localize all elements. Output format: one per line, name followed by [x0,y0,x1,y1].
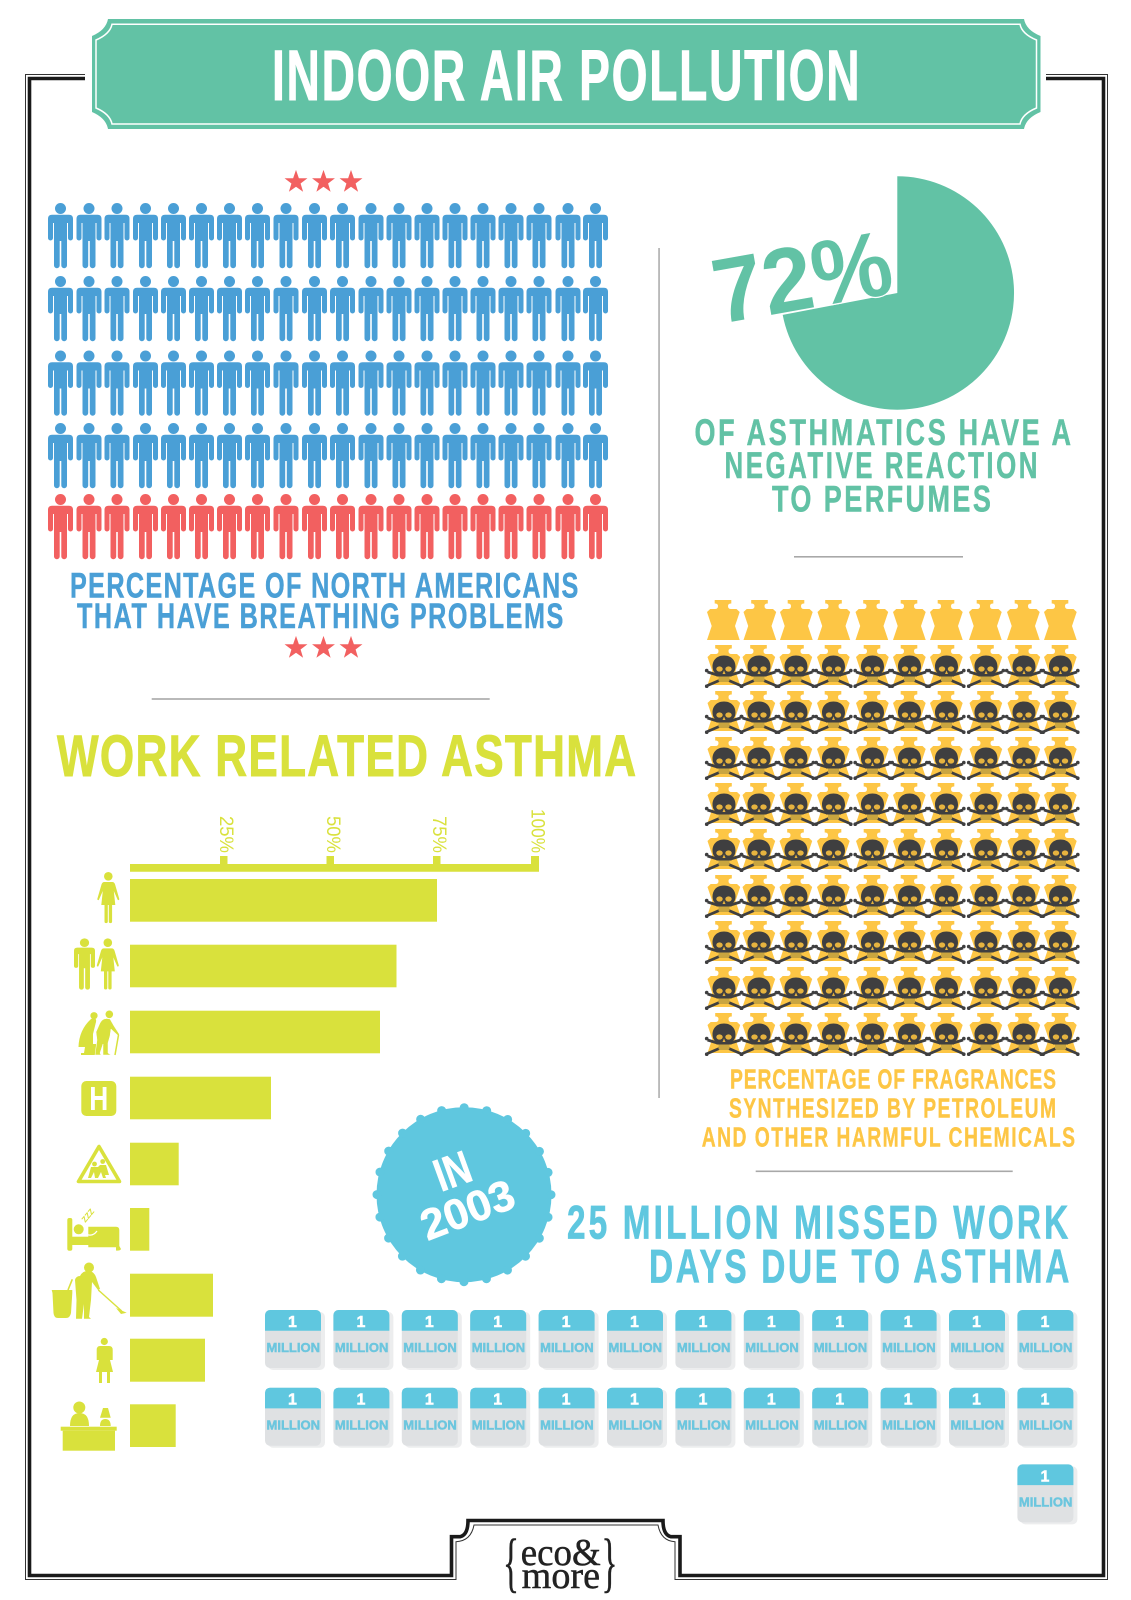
calendar pictogram: 25 million [265,1310,1077,1524]
pie chart: 72 percent [705,176,1014,410]
heading: missed work days: DAYS DUE TO ASTHMA [649,1240,1069,1293]
logo: eco & more: { [503,1526,519,1599]
logo: eco & more: eco& [521,1532,601,1574]
heading: missed work days: 25 MILLION MISSED WORK [567,1196,1069,1249]
logo: eco & more: more [522,1555,600,1597]
logo: eco & more: } [602,1526,618,1599]
axis labels: 100% [526,809,548,853]
badge: in 2003: IN [427,1140,478,1201]
axis labels [215,809,548,853]
heading: missed work days [567,1196,1069,1293]
bottles row: perfume [707,600,1077,640]
stars above people [286,171,361,191]
caption: fragrances: PERCENTAGE OF FRAGRANCES [730,1064,1056,1095]
bars [130,879,437,1447]
icon: hospital: H [89,1080,108,1117]
axis labels: 25% [215,816,236,853]
bar chart: work related asthma [130,809,548,1447]
caption: asthmatics: OF ASTHMATICS HAVE A [694,411,1071,453]
badge: in 2003: 2003 [414,1171,522,1250]
people pictogram: breathing problems [48,203,608,559]
72% label: 72% [705,212,900,344]
caption: breathing problems: PERCENTAGE OF NORTH AMERICANS [70,567,578,606]
title: INDOOR AIR POLLUTION [272,36,860,115]
axis labels: 50% [322,816,343,853]
caption: asthmatics: TO PERFUMES [772,477,991,520]
caption: breathing problems [70,567,578,636]
icon: woman [97,872,119,923]
icon: bed [67,1207,121,1251]
stars below caption [286,637,361,657]
logo: eco & more [503,1526,618,1599]
axis labels: 75% [428,816,449,853]
caption: asthmatics: NEGATIVE REACTION [724,444,1037,486]
axis with ticks [130,856,539,872]
title banner [92,19,1040,129]
caption: fragrances: SYNTHESIZED BY PETROLEUM [729,1093,1056,1124]
red row of people [48,494,608,559]
icon: elderly couple [78,1010,120,1055]
bottles with skulls grid [705,645,1080,1056]
badge: in 2003 [376,1107,552,1282]
icon: hospital [81,1080,116,1117]
icon: woman in skirt [96,1338,113,1383]
icon: man and woman [74,938,119,990]
caption: asthmatics [694,411,1071,520]
caption: breathing problems: THAT HAVE BREATHING PROBLEMS [77,597,563,636]
heading: work related asthma: WORK RELATED ASTHMA [57,723,636,788]
icon: janitor [52,1262,127,1319]
icon: bed: ZZZ [80,1207,96,1224]
icon: office desk [61,1402,117,1451]
icon: school crossing sign [78,1146,120,1182]
caption: fragrances: AND OTHER HARMFUL CHEMICALS [702,1122,1075,1154]
caption: fragrances [702,1064,1075,1154]
